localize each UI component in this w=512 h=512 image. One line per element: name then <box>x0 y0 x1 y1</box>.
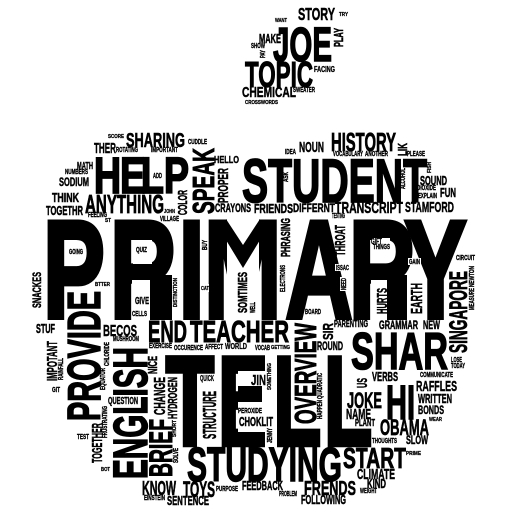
word: WELL: WELL <box>248 302 257 313</box>
word: BUY: BUY <box>200 240 209 250</box>
word: TOGETHR: TOGETHR <box>46 203 83 218</box>
word: PARENTING: PARENTING <box>334 319 368 330</box>
word: PEROXIDE: PEROXIDE <box>238 406 262 415</box>
word: GIT: GIT <box>52 385 60 394</box>
word: MUSHROOM: MUSHROOM <box>113 334 139 343</box>
word: STUDYING: STUDYING <box>187 439 342 492</box>
word: CHANGE: CHANGE <box>152 377 169 415</box>
word: HELLO: HELLO <box>214 155 239 166</box>
word: HAPPEN: HAPPEN <box>315 400 324 419</box>
word: STAMFORD: STAMFORD <box>405 200 454 216</box>
word: PROVIDE: PROVIDE <box>58 291 110 421</box>
word: SIR: SIR <box>321 323 337 340</box>
word: NEWTON: NEWTON <box>467 266 476 287</box>
word: MEASURE: MEASURE <box>467 288 476 310</box>
word: SCORE: SCORE <box>108 134 124 140</box>
word: GRAMMAR: GRAMMAR <box>379 319 418 332</box>
word: GAIN: GAIN <box>409 257 420 266</box>
word: IMPORTANT: IMPORTANT <box>151 145 178 154</box>
word: CHLORIDE: CHLORIDE <box>102 342 111 366</box>
word: RAFFLES: RAFFLES <box>416 379 457 395</box>
word: VOCABULARY: VOCABULARY <box>333 149 363 158</box>
word: CIRCUIT: CIRCUIT <box>456 253 475 262</box>
word: ANYTHING: ANYTHING <box>85 189 164 219</box>
word: MATH: MATH <box>77 161 93 172</box>
word: JOKE: JOKE <box>347 388 382 413</box>
word: NEW: NEW <box>423 319 440 332</box>
word: PLAY: PLAY <box>331 28 346 47</box>
word: GIFT: GIFT <box>371 236 382 246</box>
word: WORLD: WORLD <box>225 341 247 351</box>
word: VILLAGE: VILLAGE <box>160 214 179 223</box>
word: JOE: JOE <box>273 19 332 72</box>
word: HELP: HELP <box>94 146 189 204</box>
word: FUN: FUN <box>440 185 456 200</box>
word: TRY: TRY <box>339 12 348 18</box>
word: SHORT: SHORT <box>172 420 178 437</box>
word: FEEDBACK: FEEDBACK <box>242 478 283 493</box>
word: HISTORY: HISTORY <box>331 127 396 157</box>
word: CHOKLIT: CHOKLIT <box>239 414 273 429</box>
word: ROUND: ROUND <box>317 340 343 353</box>
word: THROAT: THROAT <box>333 225 349 256</box>
word: ENGLISH: ENGLISH <box>105 347 158 479</box>
word: JENNY: JENNY <box>265 428 274 443</box>
word: NOUN: NOUN <box>299 140 324 156</box>
word: THOUGHTS: THOUGHTS <box>372 436 397 445</box>
word: BTTER: BTTER <box>95 282 111 288</box>
word: RAINFALL: RAINFALL <box>56 358 65 380</box>
word: SOMTIMES: SOMTIMES <box>235 272 250 313</box>
word: SHAR: SHAR <box>351 323 448 381</box>
word: NAME: NAME <box>346 407 371 423</box>
word: GIVE: GIVE <box>135 296 149 307</box>
word: PLEASE: PLEASE <box>407 149 425 158</box>
word: ELECTRONS: ELECTRONS <box>278 265 287 292</box>
word: THINK: THINK <box>52 190 79 205</box>
word: BECOS: BECOS <box>103 323 137 340</box>
word: TOYS: TOYS <box>183 477 215 502</box>
word: QUIZ: QUIZ <box>136 245 147 254</box>
word: DIFFERNT: DIFFERNT <box>293 202 335 215</box>
word: THINGS: THINGS <box>373 242 390 251</box>
word: HURTS: HURTS <box>375 288 391 314</box>
word: PROPER: PROPER <box>216 168 232 203</box>
word: SPEAK: SPEAK <box>187 148 221 214</box>
word: PRIME: PRIME <box>406 451 421 457</box>
word: CRAYONS: CRAYONS <box>215 202 251 215</box>
word: FRIENDS: FRIENDS <box>254 201 293 216</box>
word: EARTH: EARTH <box>409 283 426 314</box>
word: OCCURENCE: OCCURENCE <box>174 343 203 352</box>
word: SENTENCE: SENTENCE <box>167 493 209 508</box>
word: BOT: BOT <box>101 467 110 473</box>
apple body words <box>31 127 476 508</box>
word: NEED: NEED <box>339 278 348 290</box>
word: MAKE: MAKE <box>259 31 281 46</box>
word: SOLVE: SOLVE <box>171 448 180 463</box>
word: TODAY: TODAY <box>451 361 465 370</box>
word: FRUSTRATING: FRUSTRATING <box>100 406 109 438</box>
word: SODIUM: SODIUM <box>59 176 89 189</box>
word: PAY: PAY <box>258 50 267 58</box>
word: ALCOHOL: ALCOHOL <box>398 168 407 189</box>
word: EXPLAIN: EXPLAIN <box>418 191 437 200</box>
word: CROSSWORDS: CROSSWORDS <box>245 100 278 106</box>
word: IMPOTANT: IMPOTANT <box>45 341 61 381</box>
word: SNACKES: SNACKES <box>31 272 44 308</box>
word: CUDDLE: CUDDLE <box>188 137 207 146</box>
word: ANOTHER: ANOTHER <box>365 149 388 158</box>
word: SOUND: SOUND <box>420 173 447 188</box>
word: SOMETHING: SOMETHING <box>267 363 273 390</box>
word: EXERCISE: EXERCISE <box>149 341 172 350</box>
word: GETTING: GETTING <box>271 345 290 351</box>
word: TEACHER: TEACHER <box>190 315 289 349</box>
word: WEAR: WEAR <box>429 417 443 423</box>
word: EQUATOR: EQUATOR <box>98 368 107 390</box>
word: LIK: LIK <box>395 143 410 156</box>
word: SHARING: SHARING <box>126 130 185 152</box>
word: GOING: GOING <box>69 247 83 256</box>
word: COMMUNICATE: COMMUNICATE <box>420 370 453 379</box>
word: SINGAPORE: SINGAPORE <box>446 271 473 353</box>
word: FACING: FACING <box>314 64 335 74</box>
word: ADD: ADD <box>153 171 162 180</box>
word: ROTATING: ROTATING <box>116 145 138 154</box>
word: END: END <box>148 315 187 349</box>
word: PLANT: PLANT <box>355 418 375 429</box>
word: TRANSCRIPT: TRANSCRIPT <box>335 200 403 217</box>
word: START: START <box>343 443 406 475</box>
word: HI: HI <box>386 377 415 430</box>
word: THER: THER <box>94 141 116 157</box>
word: PURPOSE: PURPOSE <box>216 484 238 493</box>
word: TOGETHER: TOGETHER <box>90 423 106 463</box>
word: PHRASING: PHRASING <box>278 218 293 257</box>
word: FEELING: FEELING <box>88 210 107 219</box>
word: CAT: CAT <box>201 286 209 292</box>
word: WRITTEN: WRITTEN <box>418 391 452 406</box>
word: ISSAC: ISSAC <box>336 263 349 272</box>
word: LOSE: LOSE <box>451 355 462 364</box>
word: US: US <box>355 378 371 388</box>
word: TOPIC: TOPIC <box>245 54 313 95</box>
word: WEIGHT: WEIGHT <box>360 486 377 495</box>
apple body words: STRUCTURE <box>200 391 221 439</box>
word: DISTINCTION: DISTINCTION <box>173 278 179 307</box>
word: TEST: TEST <box>77 432 89 441</box>
word: VOCAB: VOCAB <box>255 343 270 352</box>
word: STUF: STUF <box>36 321 55 336</box>
word: KIND: KIND <box>367 476 386 491</box>
apple body words: TESTING <box>332 211 345 220</box>
word: DIOXIDE: DIOXIDE <box>417 183 436 192</box>
word: PRIMARY: PRIMARY <box>43 193 466 348</box>
word: NUMBERS: NUMBERS <box>65 167 88 176</box>
stem cluster of words <box>242 4 348 106</box>
word: QUADRATIC: QUADRATIC <box>315 373 324 399</box>
word: JOHN: JOHN <box>164 209 175 215</box>
word: SHOW: SHOW <box>251 41 265 50</box>
word: OVERVIEW: OVERVIEW <box>289 323 323 424</box>
word: QUICK: QUICK <box>200 373 214 383</box>
word: FRENDS: FRENDS <box>304 478 356 500</box>
word: FISH: FISH <box>427 162 433 173</box>
word: KNOW: KNOW <box>142 478 176 500</box>
word: AFFECT: AFFECT <box>205 342 223 351</box>
word: SWEATER: SWEATER <box>293 85 315 94</box>
word: TELL: TELL <box>166 331 372 472</box>
word: COLOR: COLOR <box>175 190 190 215</box>
word: VERBS: VERBS <box>372 369 398 384</box>
word: EINSTEIN: EINSTEIN <box>144 493 165 502</box>
word: BOARD: BOARD <box>305 307 321 316</box>
word: FOLLOWING: FOLLOWING <box>301 492 346 507</box>
word: ST: ST <box>105 218 111 224</box>
word: CLIMATE: CLIMATE <box>357 467 395 483</box>
word: HYDROGEN: HYDROGEN <box>165 377 180 419</box>
word: WANT: WANT <box>275 18 287 24</box>
word: JIN: JIN <box>251 373 266 389</box>
word: ASK: ASK <box>281 172 290 182</box>
word: QUESTION: QUESTION <box>108 396 138 407</box>
word: NICE: NICE <box>145 356 160 374</box>
apple body words: PROBLEM <box>279 489 297 498</box>
word: OBAMA: OBAMA <box>380 415 429 440</box>
word: STORY: STORY <box>298 4 335 24</box>
word: BONDS: BONDS <box>418 404 444 417</box>
word: SLOW: SLOW <box>406 434 428 447</box>
word: IDEA: IDEA <box>285 147 296 156</box>
word: CHEMICAL: CHEMICAL <box>242 85 296 101</box>
word: BRIEF: BRIEF <box>143 419 179 477</box>
word: CELLS: CELLS <box>132 309 147 318</box>
